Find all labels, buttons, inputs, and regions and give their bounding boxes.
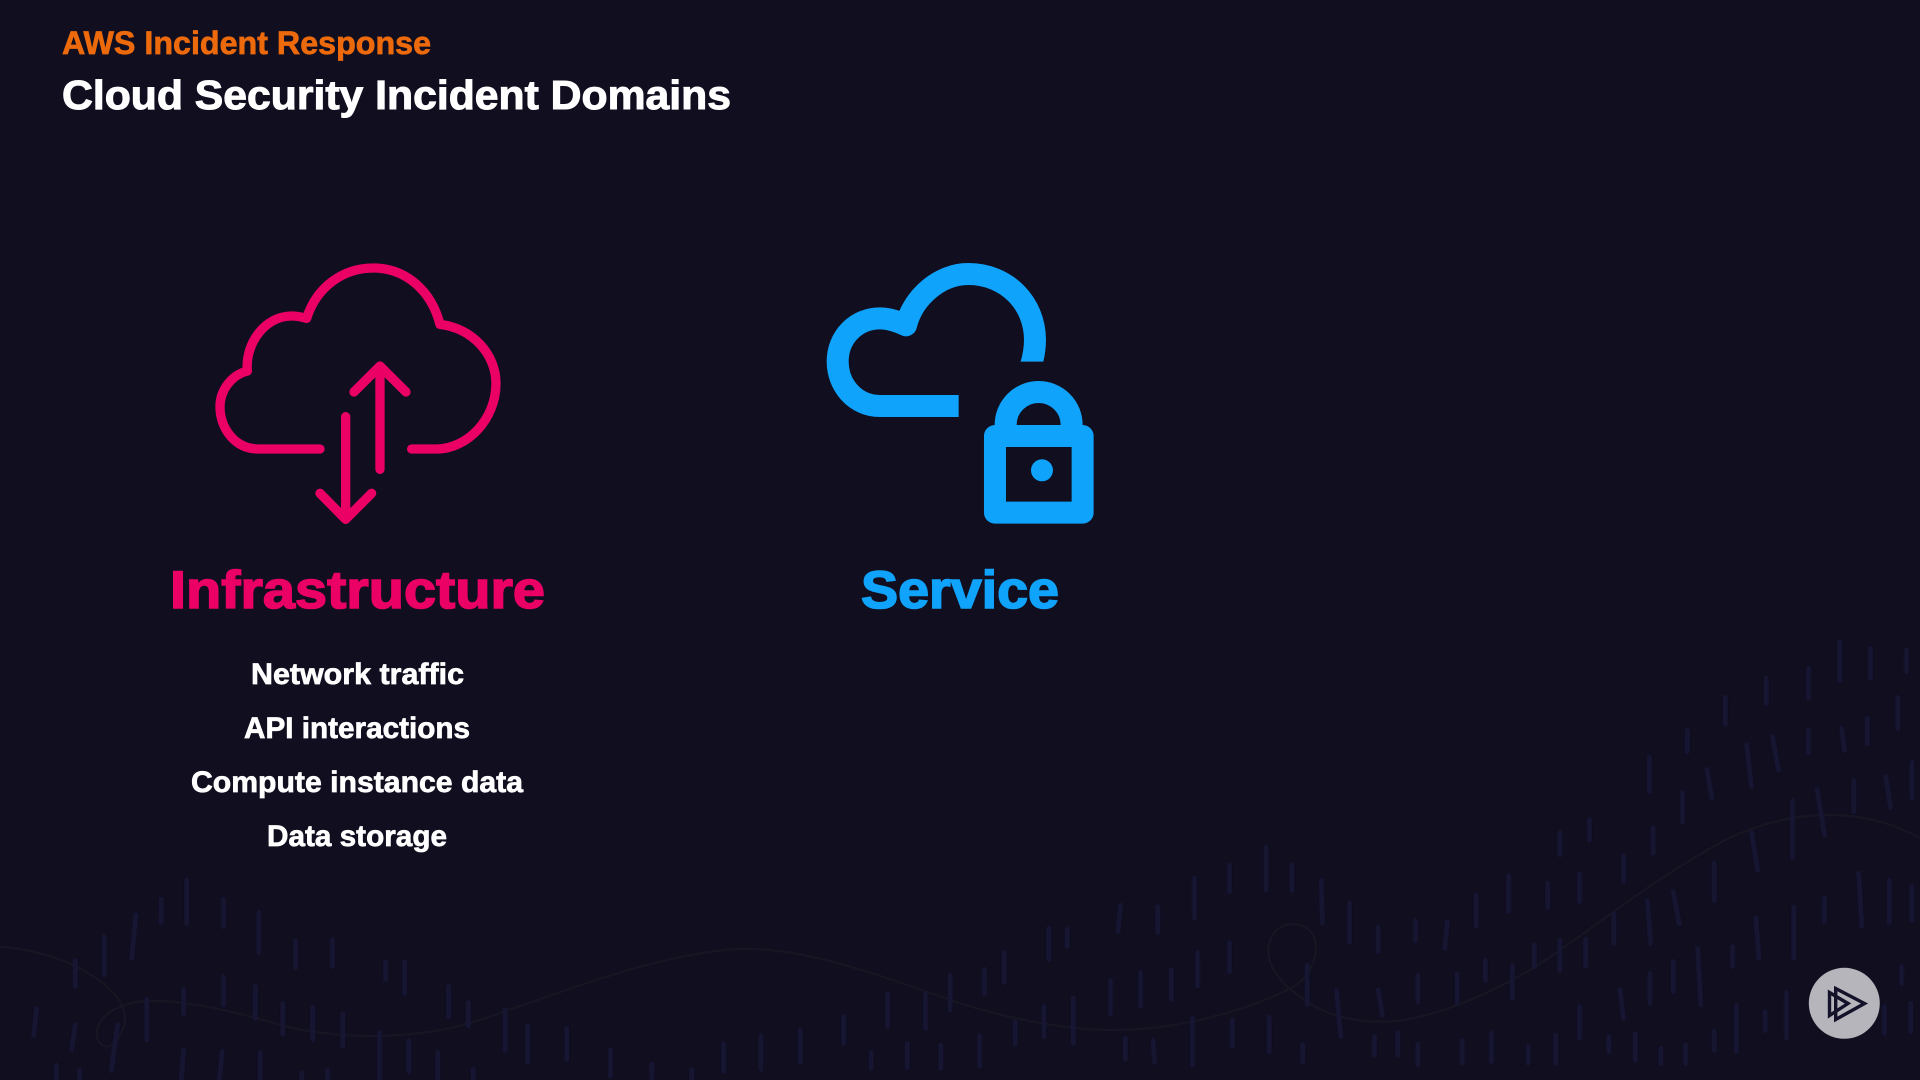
slide title: Cloud Security Incident Domains [62,72,731,118]
list item: Data storage [267,820,447,853]
list: infrastructure domains [191,658,523,853]
heading: Service: Service [861,561,1059,620]
panel: infrastructure [170,268,545,853]
panel: service [838,274,1083,620]
icon: cloud with padlock [838,274,1083,513]
background pattern: right streaks and wave [960,642,1920,1066]
list item: Compute instance data [191,766,523,799]
heading: Infrastructure: Infrastructure [170,561,545,620]
background pattern: left streaks and wave [0,880,960,1080]
course label: AWS Incident Response [62,25,431,61]
list item: API interactions [244,712,470,745]
list item: Network traffic [251,658,464,691]
icon: cloud with up and down arrows [220,268,496,519]
icon: play logo badge [1809,968,1880,1039]
